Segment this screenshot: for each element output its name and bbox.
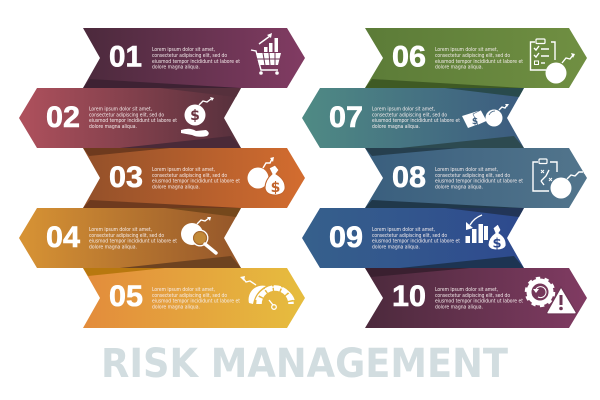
panel: step 02 xyxy=(19,88,241,148)
panel: step 05 xyxy=(83,268,305,328)
icon: banknotes and bomb: $ xyxy=(472,117,478,127)
panel: step 04 xyxy=(19,208,241,268)
text block 08: Lorem ipsum dolor sit amet, xyxy=(435,167,498,173)
text block 04: consectetur adipiscing elit, sed do xyxy=(89,233,164,239)
text block 05: consectetur adipiscing elit, sed do xyxy=(152,293,227,299)
text block 09: Lorem ipsum dolor sit amet, xyxy=(372,227,435,233)
number 04: 04 xyxy=(46,221,80,254)
text block 03: dolore magna aliqua. xyxy=(152,184,200,190)
text block 07: dolore magna aliqua. xyxy=(372,124,420,130)
number 08: 08 xyxy=(392,161,426,194)
icon: bomb with dollar and hand: $ xyxy=(190,108,200,124)
text block 06: dolore magna aliqua. xyxy=(435,65,483,71)
icon: bomb and money bag: $ xyxy=(271,180,280,196)
text block 06: Lorem ipsum dolor sit amet, xyxy=(435,47,498,53)
number 07: 07 xyxy=(329,101,363,134)
text block 03: eiusmod tempor incididunt ut labore et xyxy=(152,179,240,185)
number 05: 05 xyxy=(109,280,143,313)
icon: shopping cart with rising bars xyxy=(251,33,281,75)
text block 02: Lorem ipsum dolor sit amet, xyxy=(89,106,152,112)
text block 01: consectetur adipiscing elit, sed do xyxy=(152,53,227,59)
number 06: 06 xyxy=(392,40,426,74)
text block 09: dolore magna aliqua. xyxy=(372,244,420,250)
text block 07: eiusmod tempor incididunt ut labore et xyxy=(372,118,460,124)
text block 05: dolore magna aliqua. xyxy=(152,304,200,310)
icon: banknotes and bomb xyxy=(462,104,509,128)
text block 02: consectetur adipiscing elit, sed do xyxy=(89,112,164,118)
text block 08: eiusmod tempor incididunt ut labore et xyxy=(435,179,523,185)
icon: bomb with dollar and hand xyxy=(181,97,214,137)
icon: checklist and bomb xyxy=(530,39,575,84)
text block 07: consectetur adipiscing elit, sed do xyxy=(372,112,447,118)
text block 04: Lorem ipsum dolor sit amet, xyxy=(89,227,152,233)
number 02: 02 xyxy=(46,101,80,134)
title: RISK MANAGEMENT xyxy=(101,341,509,387)
text block 10: Lorem ipsum dolor sit amet, xyxy=(435,287,498,293)
icon: gear and warning triangle xyxy=(526,278,576,314)
number 01: 01 xyxy=(109,40,142,74)
panel: step 01 xyxy=(83,28,305,88)
text block 09: eiusmod tempor incididunt ut labore et xyxy=(372,239,460,245)
panel: step 03 xyxy=(83,148,305,208)
icon: bomb and money bag xyxy=(248,157,285,196)
text block 06: eiusmod tempor incididunt ut labore et xyxy=(435,59,523,65)
icon: strategy clipboard and bomb xyxy=(533,159,587,198)
panel: step 06 xyxy=(365,28,587,88)
number 09: 09 xyxy=(329,221,363,254)
text block 08: consectetur adipiscing elit, sed do xyxy=(435,173,510,179)
text block 01: Lorem ipsum dolor sit amet, xyxy=(152,47,215,53)
text block 07: Lorem ipsum dolor sit amet, xyxy=(372,106,435,112)
text block 03: consectetur adipiscing elit, sed do xyxy=(152,173,227,179)
text block 05: Lorem ipsum dolor sit amet, xyxy=(152,287,215,293)
text block 01: dolore magna aliqua. xyxy=(152,65,200,71)
text block 03: Lorem ipsum dolor sit amet, xyxy=(152,167,215,173)
icon: bomb under magnifying glass xyxy=(181,217,216,253)
icon: bomb and gauge xyxy=(240,276,294,309)
text block 01: eiusmod tempor incididunt ut labore et xyxy=(152,59,240,65)
text block 05: eiusmod tempor incididunt ut labore et xyxy=(152,299,240,305)
number 03: 03 xyxy=(109,161,143,194)
text block 09: consectetur adipiscing elit, sed do xyxy=(372,233,447,239)
text block 08: dolore magna aliqua. xyxy=(435,184,483,190)
panel: step 08 xyxy=(365,148,587,208)
number 10: 10 xyxy=(392,280,426,313)
icon: falling bars and money bag xyxy=(466,215,506,252)
text block 02: dolore magna aliqua. xyxy=(89,124,137,130)
text block 10: consectetur adipiscing elit, sed do xyxy=(435,293,510,299)
text block 04: eiusmod tempor incididunt ut labore et xyxy=(89,239,177,245)
panel: step 09 xyxy=(302,208,524,268)
text block 02: eiusmod tempor incididunt ut labore et xyxy=(89,118,177,124)
panel: step 10 xyxy=(365,268,587,328)
text block 06: consectetur adipiscing elit, sed do xyxy=(435,53,510,59)
text block 10: eiusmod tempor incididunt ut labore et xyxy=(435,299,523,305)
text block 10: dolore magna aliqua. xyxy=(435,304,483,310)
panel: step 07 xyxy=(302,88,524,148)
icon: falling bars and money bag: $ xyxy=(492,236,502,252)
text block 04: dolore magna aliqua. xyxy=(89,244,137,250)
